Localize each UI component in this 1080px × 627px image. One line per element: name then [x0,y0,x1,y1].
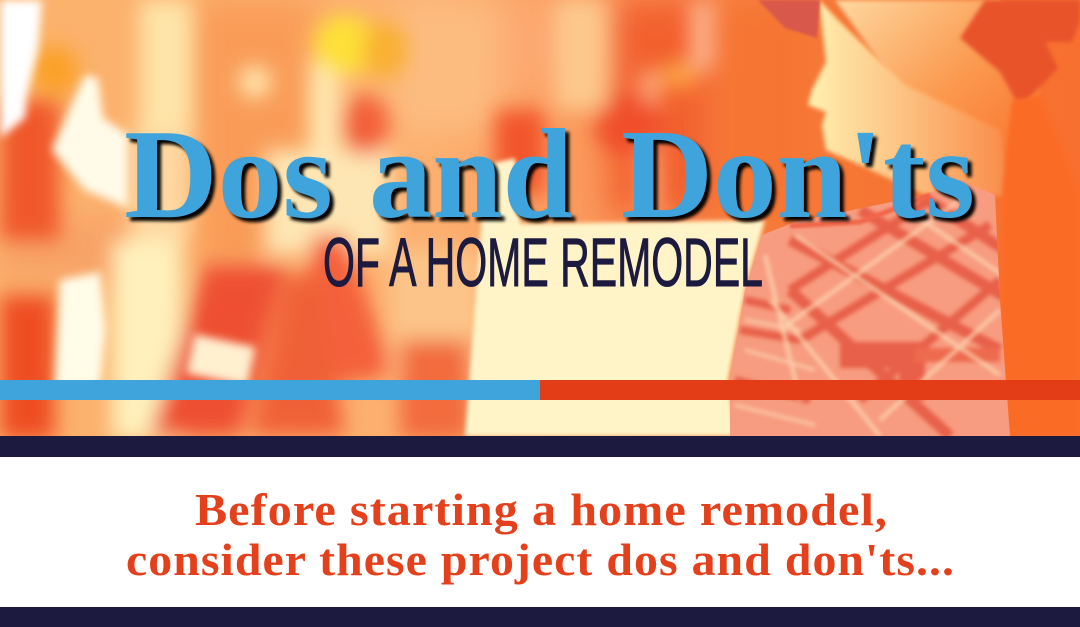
navy band top [0,436,1080,457]
intro text: Before starting a home remodel, [195,484,888,535]
subtitle: OF A HOME REMODEL [323,224,763,301]
title: Don'ts [625,107,979,249]
face and neck [808,0,1010,196]
title: Don'ts [621,103,975,245]
intro text: consider these project dos and don'ts... [126,534,955,585]
shirt collar edge [790,195,930,226]
title: Dos [124,103,333,245]
title: Dos [128,107,337,249]
hard hat and strap [960,0,1080,108]
title: and [369,103,573,245]
plaid shirt [730,180,1010,436]
colour band: blue and red [0,380,1080,400]
hard hat brim [758,0,820,38]
blueprint paper [465,158,765,436]
title: and [373,107,577,249]
intro text [126,484,955,585]
title [124,103,979,249]
ponytail [995,95,1080,436]
woman in plaid shirt [720,0,1080,440]
hero photo background [0,0,1080,440]
navy band bottom [0,607,1080,627]
hair [835,0,1040,190]
